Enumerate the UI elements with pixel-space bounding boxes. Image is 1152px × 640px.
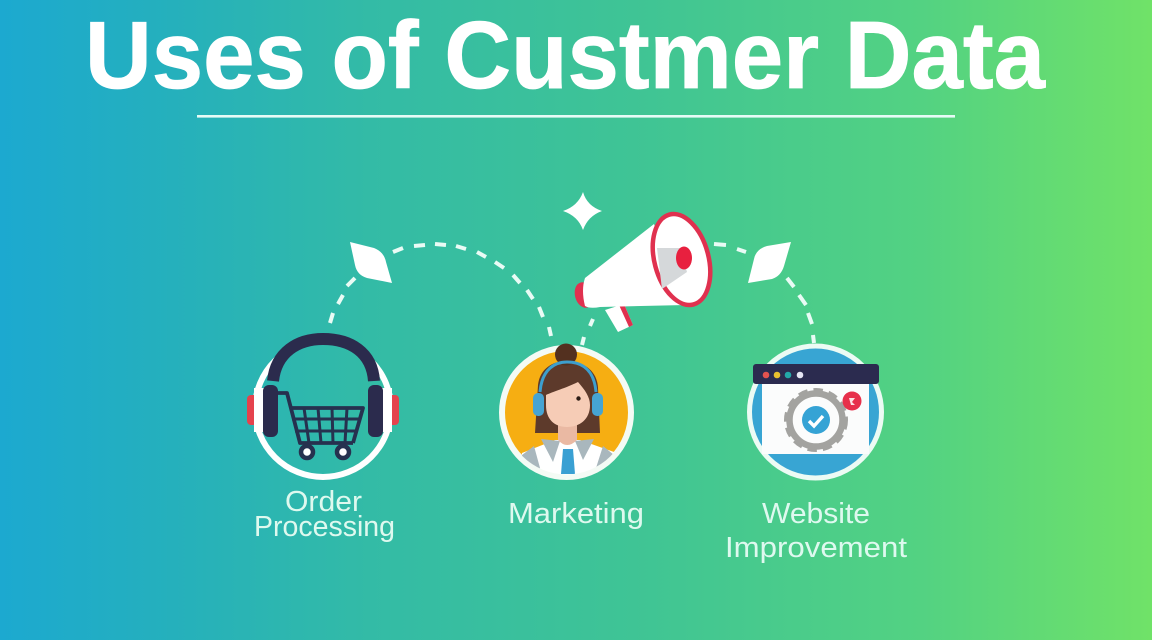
sparkle star [563,192,602,230]
megaphone body [583,224,686,308]
megaphone back cap [572,280,596,310]
headphone ear pads [247,395,259,425]
label: order processing [254,486,395,543]
avatar headset [540,362,596,392]
blue disc with ring [750,346,882,478]
item: website improvement [750,346,882,478]
megaphone red driver [676,246,692,270]
item: marketing avatar [502,344,631,478]
headphone white inner pads [254,388,264,432]
right leaf marker [748,242,791,283]
avatar face [546,382,590,427]
label: website improvement: Website [762,498,870,530]
megaphone cone shading [657,248,687,289]
headphone cups [263,385,278,437]
megaphone handle [605,304,633,332]
avatar circle [502,348,631,477]
avatar tie [561,449,575,474]
browser dots [763,372,803,378]
label: order processing: Order [285,486,362,518]
avatar eye [576,396,581,401]
browser window [762,382,869,454]
red notification badge [842,392,862,410]
label: website improvement: Improvement [725,532,907,564]
browser title bar [753,364,879,384]
label: marketing: Marketing [508,498,644,530]
megaphone bell [643,208,720,311]
gear [786,390,846,450]
check badge [802,406,830,434]
avatar neck [558,425,577,445]
label: order processing: Processing [254,511,395,543]
avatar bun [555,344,577,366]
avatar shirt [522,440,614,474]
label: website improvement [725,498,907,564]
headphone band [273,339,374,381]
megaphone [572,208,720,332]
ring [255,341,391,477]
avatar hair back [535,361,600,433]
title underline [197,115,955,118]
title: Uses of Custmer Data [85,2,1046,109]
item: order processing [247,339,399,477]
shopping cart [278,393,363,458]
left leaf marker [350,242,392,283]
dashed connectors [330,244,814,345]
